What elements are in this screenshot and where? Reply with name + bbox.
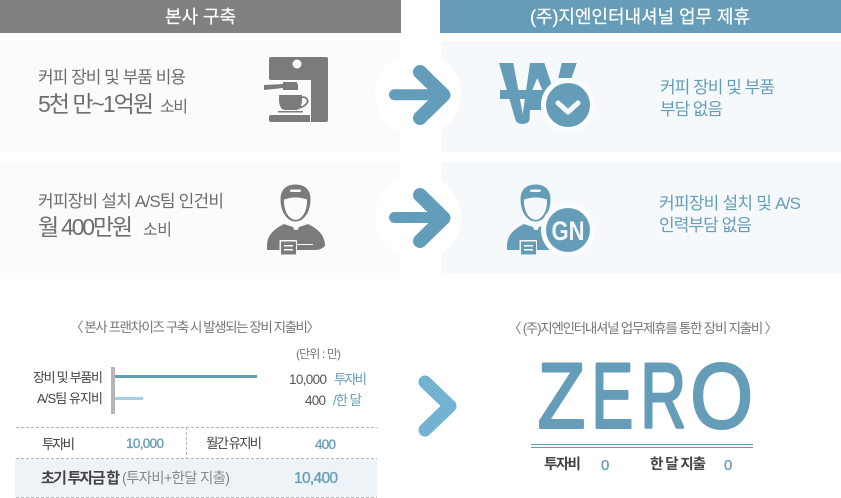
panel: HQ header (0, 0, 401, 33)
panel: equipment cost HQ (0, 41, 400, 152)
heading: partnership: (주)지엔인터내셔널 업무 제휴 (530, 7, 750, 27)
icon: technician with GN badge (507, 184, 595, 257)
summary: zero values: 0 (601, 457, 609, 474)
panel: equipment cost partner (441, 41, 841, 152)
table: expense summary: (투자비+한달 지출) (122, 470, 230, 487)
text: no staff burden: 커피장비 설치 및 A/S (659, 194, 801, 213)
summary: zero values: 0 (724, 457, 732, 474)
table: expense summary: 투자비 (42, 437, 75, 452)
chart: expense bars: 10,000 (289, 372, 327, 387)
text: equipment cost: 커피 장비 및 부품 비용 (38, 68, 186, 87)
text: no equipment burden: 부담 없음 (660, 100, 723, 119)
table: expense summary (15, 427, 377, 498)
text: staff cost: 커피장비 설치 A/S팀 인건비 (38, 192, 224, 211)
text: staff cost: 소비 (143, 221, 172, 239)
arrow: row 2 (375, 174, 461, 260)
text: equipment cost (38, 68, 188, 117)
summary: zero values: 한 달 지출 (650, 456, 706, 473)
headline: ZERO (538, 346, 753, 448)
table: expense summary: 월간 유지비 (206, 436, 262, 451)
panel: staff cost partner (441, 162, 841, 273)
text: no staff burden: 인력부담 없음 (659, 216, 752, 235)
heading: HQ expense chart: 〈 본사 프랜차이즈 구축 시 발생되는 장비 지출비〉 (70, 320, 320, 335)
chart: expense bars: 장비 및 부품비 (33, 370, 103, 385)
heading: partner expense: 〈 (주)지엔인터내셔널 업무제휴를 통한 장비 지출비 〉 (508, 321, 778, 336)
summary: zero values (544, 456, 732, 474)
icon: technician with GN badge: GN (552, 216, 584, 246)
chart: expense bars: 400 (305, 393, 326, 408)
chart: expense bars: /한 달 (333, 393, 362, 408)
arrow: chevron (425, 382, 450, 430)
text: no equipment burden: 커피 장비 및 부품 (660, 78, 775, 97)
summary: zero values: 투자비 (544, 456, 581, 473)
icon: technician (267, 184, 325, 255)
arrow: row 1 (375, 51, 461, 137)
headline: ZERO: Z (538, 346, 585, 448)
chart: expense bars: (단위 : 만) (296, 347, 341, 361)
table: expense summary: 10,400 (294, 470, 338, 487)
panel: partnership header (440, 0, 841, 33)
panel: staff cost HQ (0, 162, 400, 273)
headline: ZERO: R (640, 346, 686, 448)
text: no staff burden (659, 194, 801, 235)
text: no equipment burden (660, 78, 775, 119)
chart: expense bars: A/S팀 유지비 (37, 391, 103, 406)
text: equipment cost: 소비 (160, 98, 188, 116)
text: staff cost: 월 400만원 (38, 214, 133, 240)
chart: expense bars (33, 347, 367, 414)
text: equipment cost: 5천 만~1억원 (38, 91, 154, 117)
table: expense summary: 초기 투자금 합 (41, 470, 120, 487)
chart: expense bars: 투자비 (334, 372, 367, 387)
divider: double rule (531, 444, 753, 448)
heading: HQ: 본사 구축 (165, 7, 236, 27)
table: expense summary: 400 (315, 437, 336, 452)
headline: ZERO: E (592, 346, 633, 448)
icon: coffee machine (264, 57, 328, 122)
icon: won with check (499, 63, 595, 132)
table: expense summary: 10,000 (126, 436, 164, 451)
headline: ZERO: O (690, 346, 753, 448)
text: staff cost (38, 192, 224, 240)
